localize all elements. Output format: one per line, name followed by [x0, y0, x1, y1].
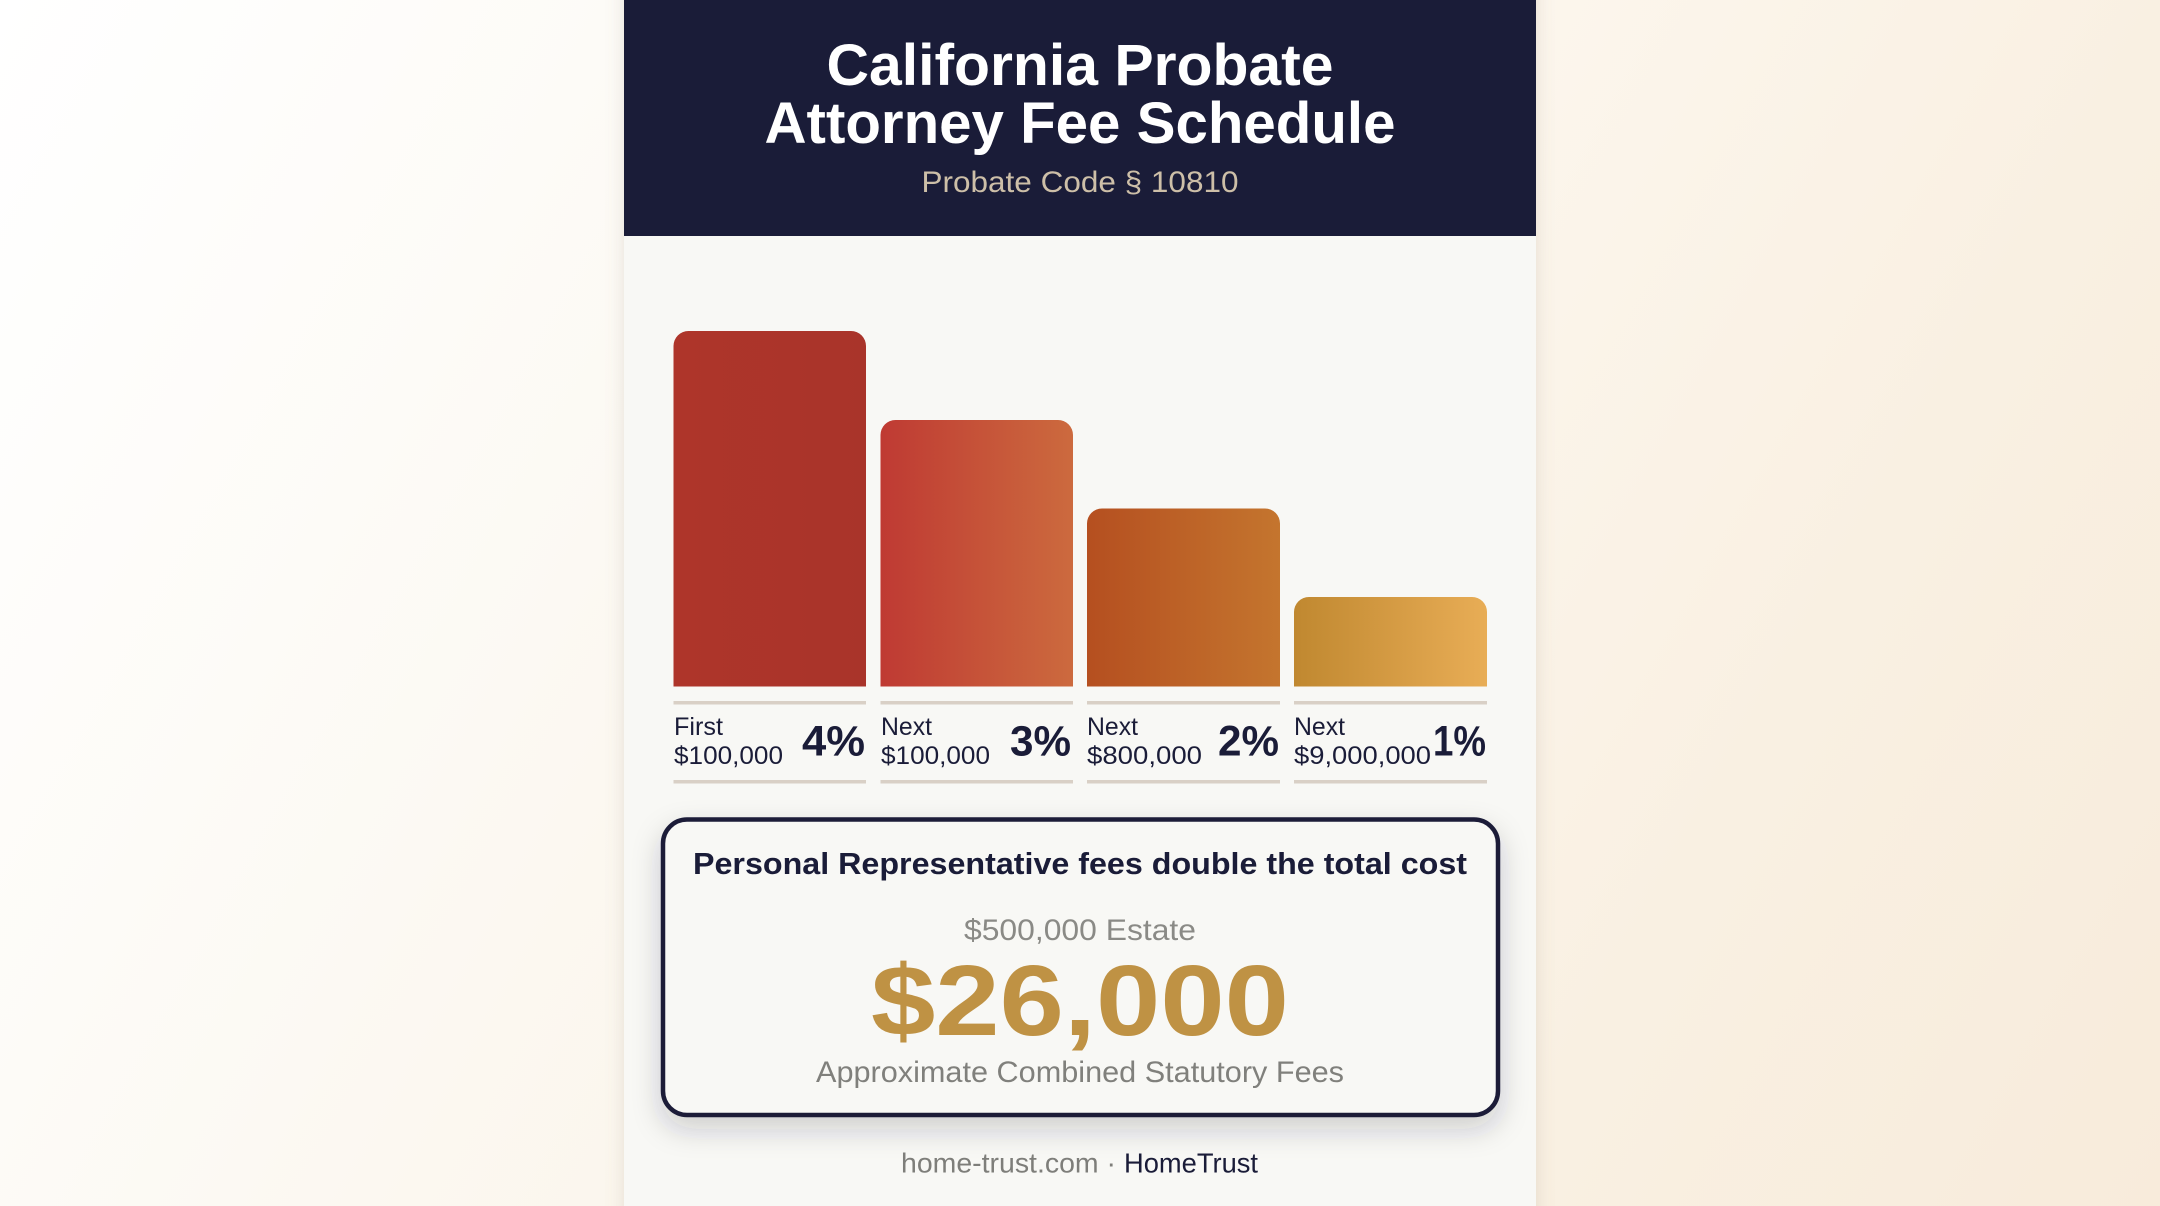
tier 4: $9,000,000: [1294, 742, 1431, 770]
tier 3: [1087, 701, 1280, 784]
tier legend: [674, 701, 1487, 784]
title: [764, 33, 1396, 156]
callout heading: Personal Representative fees double the total cost: [693, 846, 1467, 881]
bar chart: [674, 331, 1487, 686]
header band: [624, 0, 1536, 236]
tier 2: $100,000: [881, 742, 990, 770]
tier 4: Next: [1294, 713, 1345, 741]
tier 4: 1%: [1433, 718, 1486, 766]
tier 2: Next: [881, 713, 932, 741]
subtitle: Probate Code § 10810: [922, 166, 1238, 199]
footer: [901, 1148, 1258, 1178]
callout: total cost: [663, 820, 1498, 1115]
tier 2: [880, 701, 1073, 784]
estate label: $500,000 Estate: [964, 914, 1196, 947]
title: California Probate: [826, 33, 1334, 98]
bar: first $100,000: [674, 331, 866, 686]
footer: home-trust.com ·: [901, 1148, 1116, 1178]
bar: next $800,000: [1087, 508, 1280, 686]
footer: HomeTrust: [1124, 1148, 1258, 1178]
tier 1: 4%: [802, 718, 865, 766]
fee caption: Approximate Combined Statutory Fees: [816, 1056, 1344, 1089]
bar: next $9,000,000: [1294, 597, 1487, 686]
tier 2: 3%: [1010, 718, 1071, 766]
tier 1: $100,000: [674, 742, 783, 770]
title: Attorney Fee Schedule: [764, 91, 1396, 156]
tier 3: 2%: [1218, 718, 1279, 766]
tier 3: Next: [1087, 713, 1138, 741]
bar: next $100,000: [880, 420, 1073, 686]
tier 4: [1294, 701, 1487, 784]
tier 1: [674, 701, 866, 784]
tier 3: $800,000: [1087, 742, 1202, 770]
big number: $26,000: [871, 945, 1289, 1057]
panel: main card: [624, 0, 1536, 1206]
tier 1: First: [674, 713, 723, 741]
